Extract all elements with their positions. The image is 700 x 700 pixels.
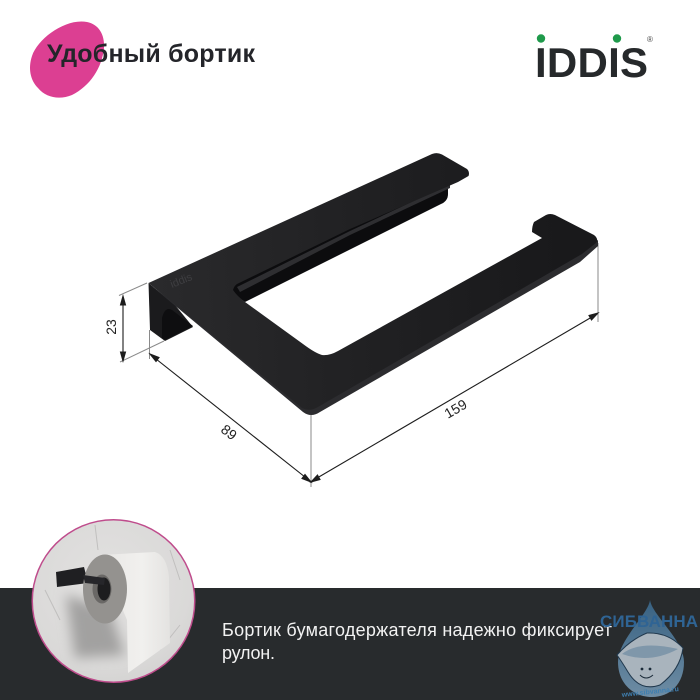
paper [108, 552, 170, 673]
dark footer band [0, 588, 700, 700]
dimension label: 89: 89 [218, 421, 240, 443]
marble veins [45, 525, 180, 650]
dimension extension lines [119, 243, 598, 487]
dimension label: 23: 23 [103, 319, 119, 335]
shelf under top bar [228, 170, 448, 302]
logo: IDDIS: IDDIS [535, 39, 648, 86]
watermark: sibvanna: СИБВАННА [600, 612, 698, 631]
product: paper holder [148, 153, 598, 415]
top surface [148, 153, 597, 410]
roll side [83, 554, 127, 624]
heading: Удобный бортик [47, 40, 255, 68]
dimension label: 159: 159 [441, 396, 470, 421]
body text [222, 620, 612, 663]
imprinted logo: iddis [169, 271, 195, 291]
watermark: sibvanna [600, 600, 698, 699]
photo: roll on holder [30, 515, 200, 685]
body text: рулон. [222, 643, 275, 663]
watermark: sibvanna: www.sibvanna.ru [620, 686, 679, 699]
leg and underside [148, 283, 193, 341]
front thickness [149, 240, 598, 415]
dimension arrows [120, 296, 598, 482]
pink blob [30, 21, 104, 98]
body text: Бортик бумагодержателя надежно фиксирует [222, 620, 612, 640]
bracket [56, 567, 88, 587]
logo: IDDIS: ® [647, 35, 653, 44]
soft shadow [66, 595, 125, 658]
